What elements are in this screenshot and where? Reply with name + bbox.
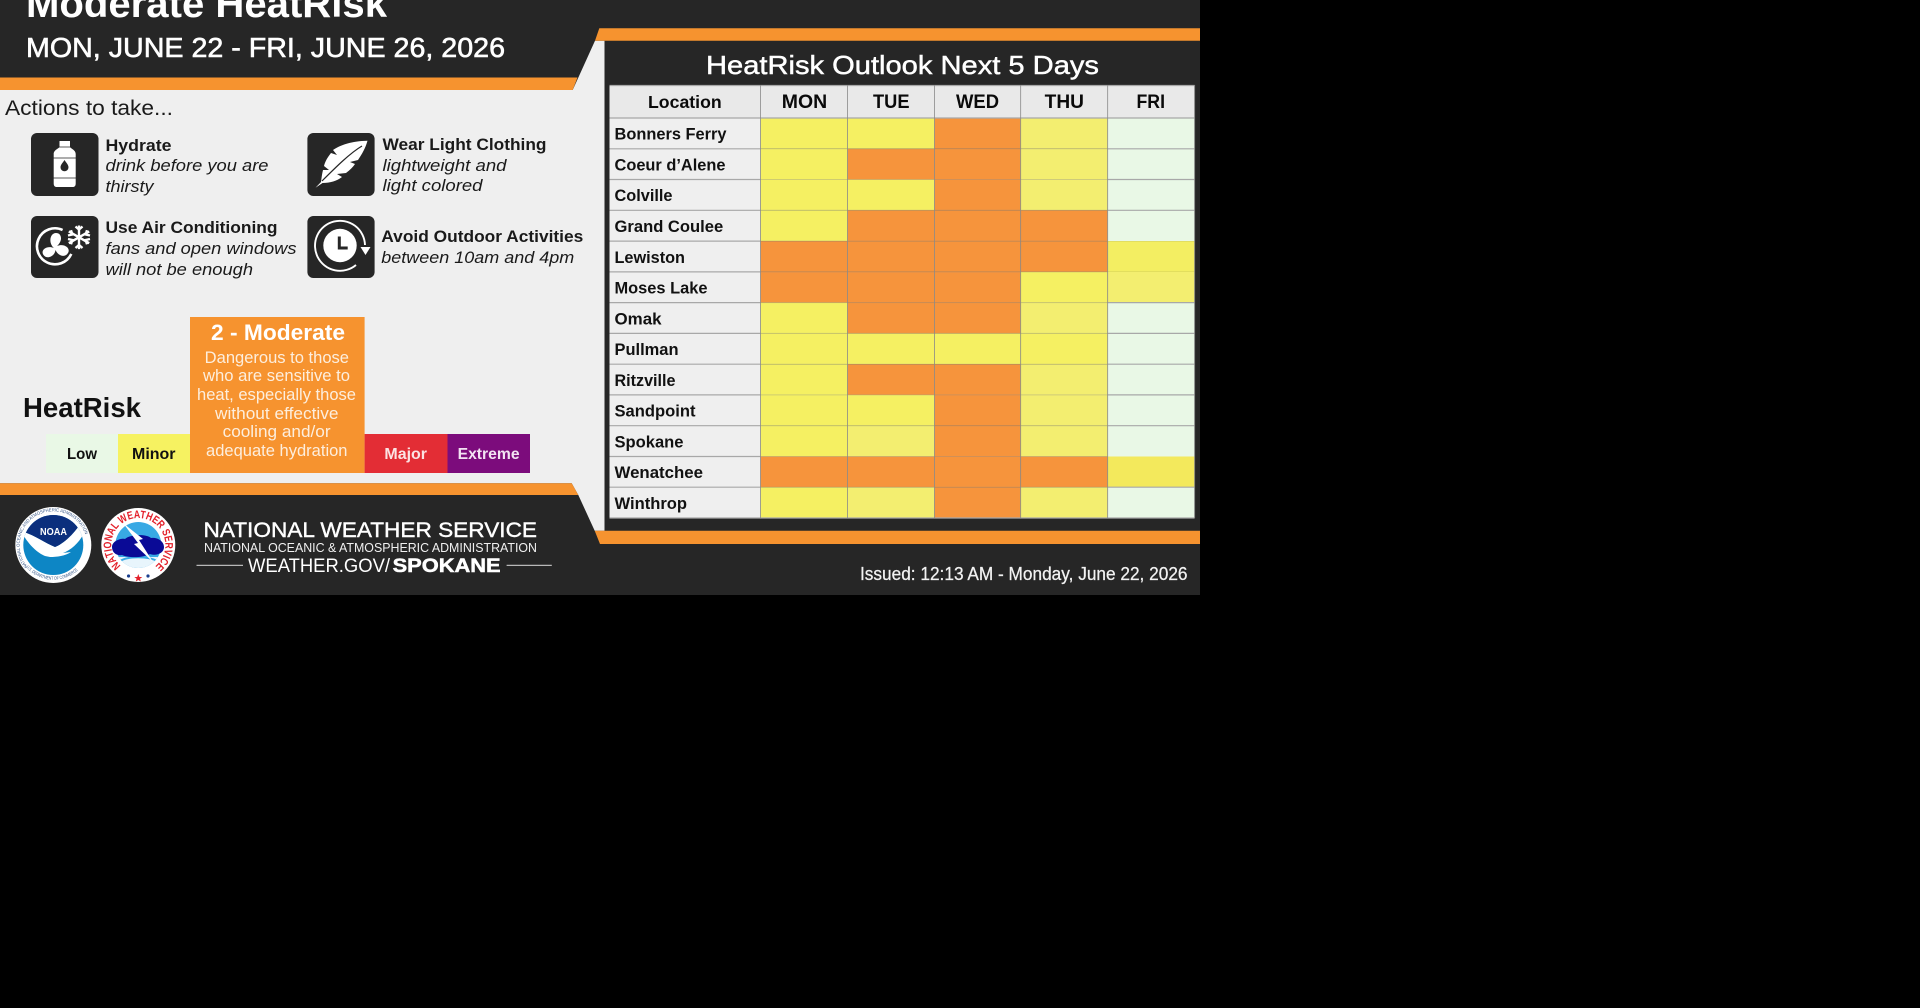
row: Coeur d'Alene: Coeur d’Alene — [614, 156, 726, 174]
scale: extreme: Extreme — [458, 446, 520, 463]
action: use air conditioning: fans and open windows — [106, 239, 297, 258]
scale: moderate callout: without effective — [214, 405, 338, 423]
date range: MON, JUNE 22 - FRI, JUNE 26, 2026 — [26, 32, 505, 63]
orange band: footer right — [595, 531, 1200, 544]
table: HeatRisk outlook — [610, 85, 1195, 518]
scale: moderate callout: who are sensitive to — [202, 367, 350, 385]
scale: moderate callout — [190, 317, 365, 473]
action: wear light clothing: lightweight and — [382, 156, 507, 175]
scale: moderate callout: adequate hydration — [206, 442, 348, 460]
scale: low — [46, 434, 118, 473]
panel: actions and scale background — [0, 41, 604, 531]
scale: major: Major — [384, 446, 427, 463]
footer: agency text: SPOKANE — [393, 555, 501, 577]
action: avoid outdoor activities: Avoid Outdoor Activities — [381, 227, 583, 246]
heading: actions to take: Actions to take... — [5, 96, 173, 120]
row: Colville: Colville — [614, 186, 672, 205]
row: Bonners Ferry — [610, 118, 1195, 149]
row: Moses Lake: Moses Lake — [614, 279, 708, 298]
action: avoid outdoor activities: between 10am and 4pm — [381, 248, 574, 267]
table header: MON — [782, 92, 827, 113]
action: hydrate: thirsty — [106, 177, 155, 196]
scale: minor: Minor — [132, 446, 176, 463]
row: Colville — [610, 180, 1195, 210]
scale: major — [365, 434, 448, 473]
footer: agency text: NATIONAL WEATHER SERVICE — [204, 518, 537, 542]
table header — [610, 85, 1195, 118]
heading: HeatRisk scale: HeatRisk — [23, 392, 141, 423]
scale: low: Low — [67, 446, 98, 463]
action: wear light clothing — [307, 133, 546, 196]
row: Winthrop: Winthrop — [614, 494, 687, 513]
row: Spokane: Spokane — [614, 432, 684, 451]
scale: moderate callout: 2 - Moderate — [211, 320, 345, 345]
logo: National Weather Service: NATIONAL WEATHER SERVICE — [104, 510, 173, 572]
action: hydrate — [31, 133, 268, 196]
action: hydrate: drink before you are — [106, 156, 268, 175]
row: Grand Coulee — [610, 210, 1195, 241]
icon: fan and snowflake — [31, 216, 98, 278]
row: Grand Coulee: Grand Coulee — [614, 217, 723, 236]
row: Ritzville — [610, 364, 1195, 395]
table header: TUE — [873, 92, 910, 113]
action: avoid outdoor activities — [307, 216, 583, 278]
logo: NOAA: NATIONAL OCEANIC AND ATMOSPHERIC ADMINISTRATION — [16, 508, 88, 568]
row: Pullman — [610, 333, 1195, 364]
logo: NOAA: U.S. DEPARTMENT OF COMMERCE — [26, 565, 78, 580]
scale: moderate callout: heat, especially those — [197, 386, 356, 404]
icon: clock — [307, 216, 375, 278]
row: Sandpoint — [610, 395, 1195, 426]
row: Moses Lake — [610, 272, 1195, 303]
icon: water bottle — [31, 133, 98, 196]
action: hydrate: Hydrate — [106, 136, 172, 155]
scale: moderate callout: Dangerous to those — [205, 349, 349, 367]
heading: outlook: HeatRisk Outlook Next 5 Days — [706, 50, 1099, 80]
action: use air conditioning — [31, 216, 297, 279]
row: Sandpoint: Sandpoint — [614, 402, 696, 421]
action: use air conditioning: Use Air Conditioning — [106, 218, 278, 237]
footer: agency text: WEATHER.GOV/ — [248, 555, 391, 577]
row: Lewiston — [610, 241, 1195, 272]
row: Wenatchee: Wenatchee — [614, 463, 703, 482]
table header: THU — [1045, 92, 1084, 113]
row: Omak — [610, 303, 1195, 333]
scale: extreme — [448, 434, 530, 473]
row: Spokane — [610, 426, 1195, 456]
action: wear light clothing: Wear Light Clothing — [382, 135, 546, 154]
orange band: header right — [595, 28, 1200, 41]
footer: agency text — [196, 518, 552, 577]
logo: NOAA: NOAA — [40, 526, 67, 538]
row: Lewiston: Lewiston — [614, 248, 685, 267]
row: Bonners Ferry: Bonners Ferry — [614, 125, 727, 144]
action: wear light clothing: light colored — [382, 176, 483, 195]
footer: agency text: NATIONAL OCEANIC & ATMOSPHERIC ADMINISTRATION — [204, 540, 537, 555]
graphic background — [0, 0, 1200, 595]
orange band: header left — [0, 78, 578, 90]
table header: FRI — [1136, 92, 1165, 113]
row: Omak: Omak — [614, 309, 662, 328]
action: use air conditioning: will not be enough — [106, 260, 253, 279]
row: Ritzville: Ritzville — [614, 371, 676, 390]
orange band: footer left — [0, 483, 578, 495]
icon: feather — [307, 133, 375, 196]
row: Pullman: Pullman — [614, 340, 678, 359]
scale: minor — [118, 434, 190, 473]
row: Coeur d'Alene — [610, 149, 1195, 180]
issued timestamp: Issued: 12:13 AM - Monday, June 22, 2026 — [860, 564, 1188, 584]
row: Winthrop — [610, 487, 1195, 518]
row: Wenatchee — [610, 456, 1195, 487]
table header: Location — [648, 92, 722, 112]
scale: moderate callout: cooling and/or — [223, 423, 331, 441]
table header: WED — [956, 92, 999, 113]
